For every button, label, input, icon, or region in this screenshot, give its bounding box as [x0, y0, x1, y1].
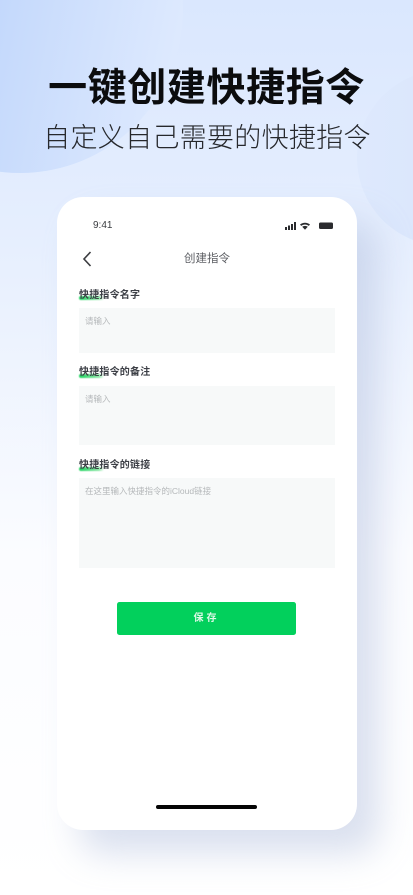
label highlight: note — [79, 374, 104, 378]
icon: status bar signal, wifi and battery — [285, 222, 333, 230]
screen heading: 创建指令 — [184, 253, 230, 265]
label highlight: name — [79, 296, 104, 300]
save button — [117, 602, 296, 635]
label: shortcut note: 快捷指令的备注 — [79, 367, 150, 378]
label: shortcut link: 快捷指令的链接 — [79, 460, 150, 471]
panel: phone screen — [57, 197, 357, 830]
subtitle: 自定义自己需要的快捷指令 — [43, 123, 371, 153]
placeholder: name: 请输入 — [85, 316, 111, 326]
home indicator — [156, 805, 257, 809]
placeholder: link: 在这里输入快捷指令的iCloud链接 — [85, 486, 211, 496]
input: shortcut note — [79, 386, 335, 445]
input: shortcut link — [79, 478, 335, 568]
label highlight: link — [79, 467, 104, 471]
save button: 保存 — [194, 613, 220, 624]
input: shortcut name — [79, 308, 335, 353]
status bar time: 9:41 — [93, 220, 112, 231]
label: shortcut name: 快捷指令名字 — [79, 290, 140, 301]
placeholder: note: 请输入 — [85, 394, 111, 404]
icon: back arrow — [83, 252, 91, 266]
title: 一键创建快捷指令 — [48, 67, 365, 110]
